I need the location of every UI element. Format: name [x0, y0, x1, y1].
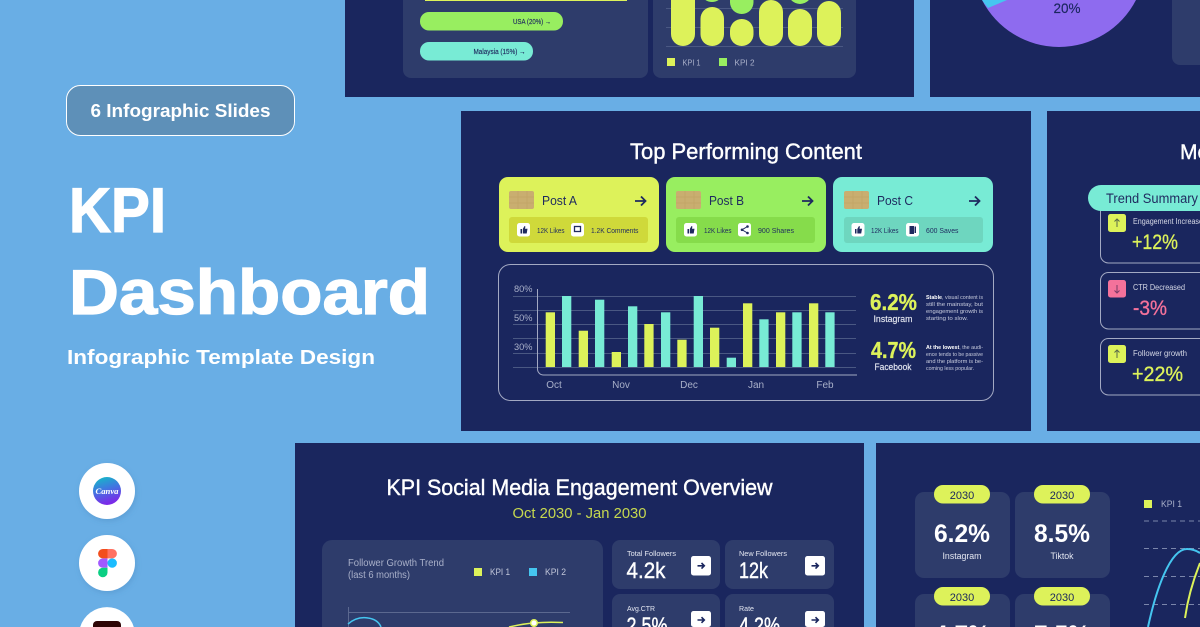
stat: Facebook 4.7%: ence tends to be passive	[926, 352, 983, 358]
legend	[667, 58, 755, 68]
stat: Instagram 6.2%: engagement growth is	[926, 309, 983, 315]
stats band: 600 Saves	[926, 228, 959, 235]
trend box: CTR: CTR Decreased	[1133, 283, 1185, 292]
subtitle: Infographic Template Design	[67, 347, 375, 369]
pie chart	[982, 0, 1136, 47]
stats band	[509, 217, 648, 243]
stats band: 12K Likes	[871, 228, 899, 235]
bar chart: Jan	[748, 380, 764, 391]
panel: country bars	[403, 0, 648, 78]
card: Post B	[666, 177, 826, 252]
stat card: Tiktok 8.5%: 8.5%	[1034, 520, 1090, 548]
legend: KPI 2	[545, 567, 566, 577]
bar: top country	[425, 0, 627, 1]
arrow	[802, 196, 812, 206]
stat: Facebook 4.7%: 4.7%	[871, 337, 916, 363]
stat: Instagram 6.2%: still the mainstay, but	[926, 302, 984, 308]
date range: Oct 2030 - Jan 2030	[512, 505, 646, 522]
panel: platform yearly stats slide	[876, 443, 1200, 627]
pills: KPI 1	[671, 0, 841, 46]
panel: top slide, regional and KPI charts	[345, 0, 914, 97]
stat card: Tiktok 8.5%: 2030	[1050, 490, 1074, 502]
stat: Instagram 6.2%	[870, 289, 984, 325]
stat: Instagram 6.2%: starting to slow.	[926, 316, 968, 322]
stat: Facebook 4.7%: Facebook	[874, 362, 912, 373]
panel: KPI Social Media Engagement Overview slide	[295, 443, 864, 627]
stat card: Total Followers	[612, 540, 720, 589]
stat: Facebook 4.7%	[871, 337, 983, 373]
stat card: Instagram 6.2%: 6.2%	[934, 520, 990, 548]
stat card: 4.7%	[915, 587, 1010, 627]
heading: KPI Social Media Engagement Overview	[386, 475, 773, 500]
bar chart	[513, 284, 857, 391]
stat card: Tiktok 8.5%: Tiktok	[1050, 551, 1074, 561]
panel: monthly bar chart frame	[498, 264, 994, 400]
stat card: New Followers	[725, 540, 834, 589]
stats band: 900 Shares	[758, 228, 794, 235]
stat: Facebook 4.7%: and the platform is be-	[926, 359, 983, 365]
stat card: New Followers: New Followers	[739, 549, 787, 558]
legend	[474, 567, 566, 577]
trend box: engagement: +12%	[1132, 231, 1178, 254]
bar: Malaysia	[420, 42, 533, 60]
thumbnail	[676, 191, 701, 209]
card: Post A: Post A	[542, 193, 577, 208]
title: Dashboard: Dashboard	[69, 258, 430, 328]
trend box: follower growth: Follower growth	[1133, 349, 1187, 358]
bars: teal series	[562, 296, 835, 367]
thumbnail	[509, 191, 534, 209]
line chart with dashed grid: KPI 1	[1161, 499, 1182, 509]
panel: KPI pill chart	[653, 0, 856, 78]
panel: Top Performing Content slide	[461, 111, 1031, 431]
stat card: 7.5%	[1015, 587, 1110, 627]
legend: KPI 2	[734, 58, 755, 68]
icon: third tool badge	[80, 607, 134, 627]
stats band	[844, 217, 983, 243]
bar chart: 30%	[514, 342, 533, 353]
stat: Facebook 4.7%: At the lowest, the audi-	[926, 345, 983, 351]
stat card: Instagram 6.2%: 2030	[950, 490, 974, 502]
stat: Instagram 6.2%: 6.2%	[870, 289, 917, 315]
bar: Malaysia: Malaysia (15%) →	[474, 49, 526, 56]
card: Post C	[833, 177, 993, 252]
arrow	[969, 196, 980, 206]
bars: yellow series	[546, 303, 818, 367]
panel: Trend Summary slide	[1047, 111, 1200, 431]
stats band: 1.2K Comments	[591, 228, 639, 235]
bar: USA: USA (20%) →	[513, 19, 551, 26]
line chart with dashed grid	[1144, 499, 1200, 627]
stat card: Rate	[725, 594, 834, 627]
stat card: Instagram 6.2%	[915, 485, 1010, 578]
legend: KPI 1	[490, 567, 510, 577]
panel: follower growth chart: Follower Growth Trend	[348, 558, 444, 569]
line chart	[348, 607, 570, 627]
stat: Instagram 6.2%: Stable, visual content is	[926, 295, 983, 301]
stat card: Tiktok 8.5%	[1015, 485, 1110, 578]
stat card: Rate: Rate	[739, 604, 754, 613]
bar chart: 50%	[514, 313, 533, 324]
trend box: follower growth: +22%	[1132, 363, 1183, 386]
stat card: New Followers: 12k	[739, 558, 769, 583]
card: Post B: Post B	[709, 193, 744, 208]
bar: USA	[420, 12, 563, 30]
stats band: 12K Likes	[537, 228, 565, 235]
stat card: Total Followers: Total Followers	[627, 549, 676, 558]
heading: Top Performing Content	[630, 139, 862, 164]
bar chart: Dec	[680, 380, 698, 391]
pill: Trend Summary	[1088, 185, 1200, 211]
pill: Trend Summary: Trend Summary	[1106, 191, 1198, 206]
badge: 6 Infographic Slides: 6 Infographic Slides	[90, 101, 270, 121]
bar chart: 80%	[514, 284, 533, 295]
stat: Instagram 6.2%: Instagram	[874, 314, 913, 325]
arrow	[635, 196, 646, 206]
legend: KPI 1	[682, 58, 701, 68]
icon: Canva: Canva	[96, 487, 118, 496]
bar chart: Feb	[816, 380, 834, 391]
panel: follower growth chart	[322, 540, 603, 627]
title: KPI: KPI	[69, 176, 166, 246]
stat card: Avg.CTR	[612, 594, 720, 627]
stat card: Avg.CTR: Avg.CTR	[627, 604, 656, 613]
panel: top right slide with pie chart	[930, 0, 1200, 97]
badge: 6 Infographic Slides	[66, 86, 294, 136]
trend box: CTR	[1100, 272, 1200, 329]
icon: Canva	[79, 463, 135, 519]
pills: KPI 2	[705, 0, 809, 14]
thumbnail	[844, 191, 869, 209]
stat card: 4.7%: 2030	[950, 592, 974, 604]
stats band: 12K Likes	[704, 228, 732, 235]
stat card: Total Followers: 4.2k	[626, 558, 666, 583]
label: 20%: 20%	[1053, 1, 1081, 16]
panel: follower growth chart: (last 6 months)	[348, 570, 410, 581]
card: Post A	[499, 177, 659, 252]
heading block: left column	[66, 86, 430, 369]
stat card: Instagram 6.2%: Instagram	[942, 551, 982, 561]
trend box: CTR: -3%	[1133, 297, 1167, 320]
trend box: follower growth	[1100, 338, 1200, 395]
bar chart: Nov	[612, 380, 630, 391]
stat: Facebook 4.7%: coming less popular.	[926, 366, 974, 372]
stat card: 7.5%: 2030	[1050, 592, 1074, 604]
side card	[1172, 0, 1200, 65]
icon: Figma	[79, 535, 135, 591]
stats band	[676, 217, 815, 243]
trend box: engagement	[1100, 205, 1200, 263]
card: Post C: Post C	[877, 193, 913, 208]
bar chart: Oct	[546, 380, 562, 391]
